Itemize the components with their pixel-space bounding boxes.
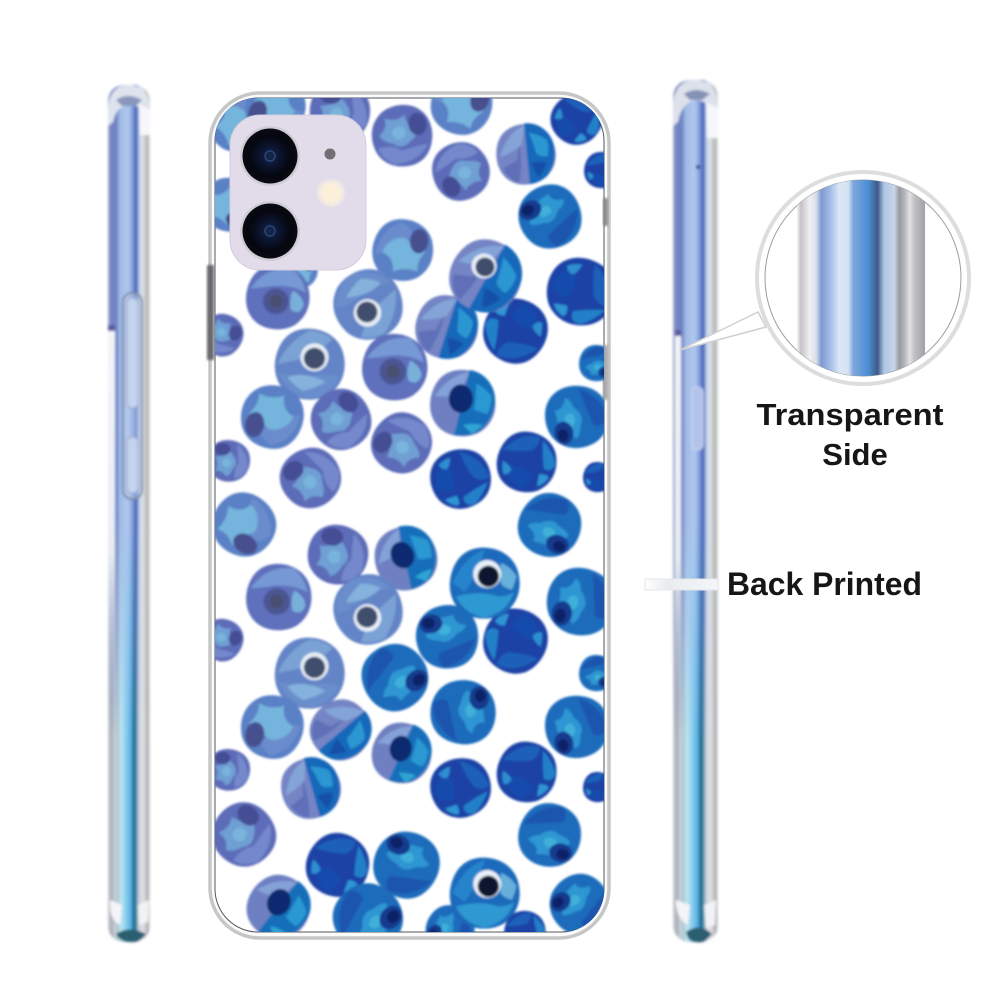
callout: transparent side pointer <box>680 312 766 350</box>
icon: upper lens <box>240 126 300 186</box>
callout: magnified side circle <box>757 170 969 386</box>
icon: flash <box>317 179 345 207</box>
icon: microphone <box>324 148 336 160</box>
icon: lower lens <box>240 201 300 261</box>
icon: side buttons <box>123 293 142 499</box>
phone back with blueberry print <box>206 91 611 940</box>
icon: side button <box>692 387 703 450</box>
blueberry pattern <box>215 98 604 932</box>
right side view of phone <box>673 80 718 942</box>
label line two: Side <box>822 437 888 472</box>
label: Transparent Side: Transparent <box>756 397 944 432</box>
label: Back Printed: Back Printed <box>727 566 922 602</box>
camera module <box>230 115 366 270</box>
left side view of phone <box>108 85 150 942</box>
leader: back printed <box>645 579 718 590</box>
